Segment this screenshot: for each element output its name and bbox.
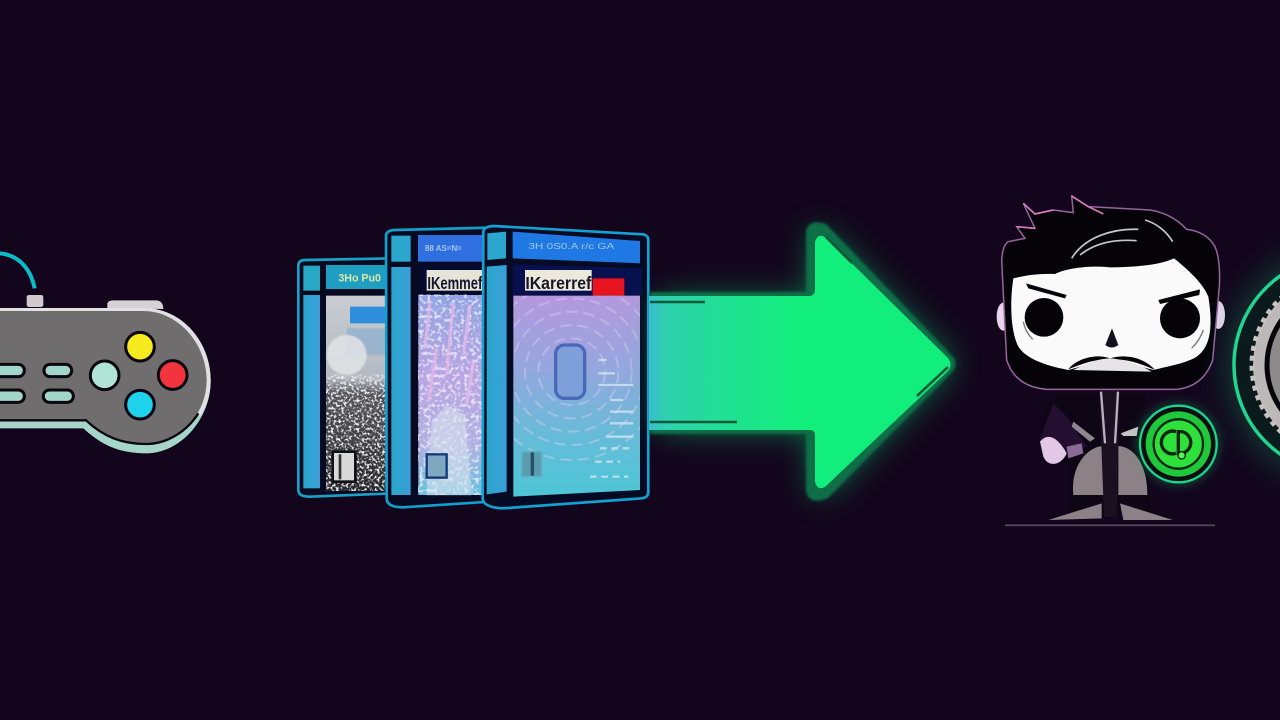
icon: game controller [0,253,211,453]
figure body [1039,390,1173,520]
game box: front [483,226,660,508]
game box: front: IKarerref [525,273,592,293]
shoulder button [107,300,163,309]
figure nose [1105,328,1118,347]
figure base line [1005,523,1215,528]
arrow halo [650,222,956,501]
arrow glow [660,230,951,495]
large coin glow [1225,247,1280,483]
figure ears [997,303,1010,331]
coin gear teeth [1252,274,1280,456]
game box: front: 3H 0S0.A r/c GA [528,241,615,251]
game box: middle: 88 AS=N= [425,244,462,253]
hair highlights [1072,220,1173,258]
controller body [0,308,211,453]
box spine [487,232,506,260]
D-pad side buttons [0,364,73,402]
coin centre [1267,289,1280,441]
arrow highlights [650,237,948,422]
small coin badge [1140,406,1217,482]
game box: middle: IKemmef [427,273,482,293]
icon: three game boxes [298,226,660,508]
arrow body [649,236,950,488]
box artwork [513,296,640,497]
game box: back: 3Ho Pu0 [338,273,381,285]
figure face [1011,258,1211,370]
coloured action buttons [90,332,187,419]
coin gear edge [1253,275,1280,455]
figure moustache [1068,356,1155,370]
large coin [1234,256,1280,474]
box title band [513,264,642,295]
controller cable [0,253,35,288]
cable connector [27,295,43,307]
figure eyes and brows [1023,283,1203,348]
game box: middle [386,228,490,507]
hair spike tint [1017,196,1103,228]
figure hair and beard [1002,196,1220,389]
small coin badge glow [1137,402,1220,486]
infographic scene [0,194,1280,526]
arrow [649,222,956,501]
coin outer ring [1234,256,1280,474]
game box: back [298,258,393,497]
icon: collectible figure [997,196,1225,525]
box banner [513,232,640,263]
